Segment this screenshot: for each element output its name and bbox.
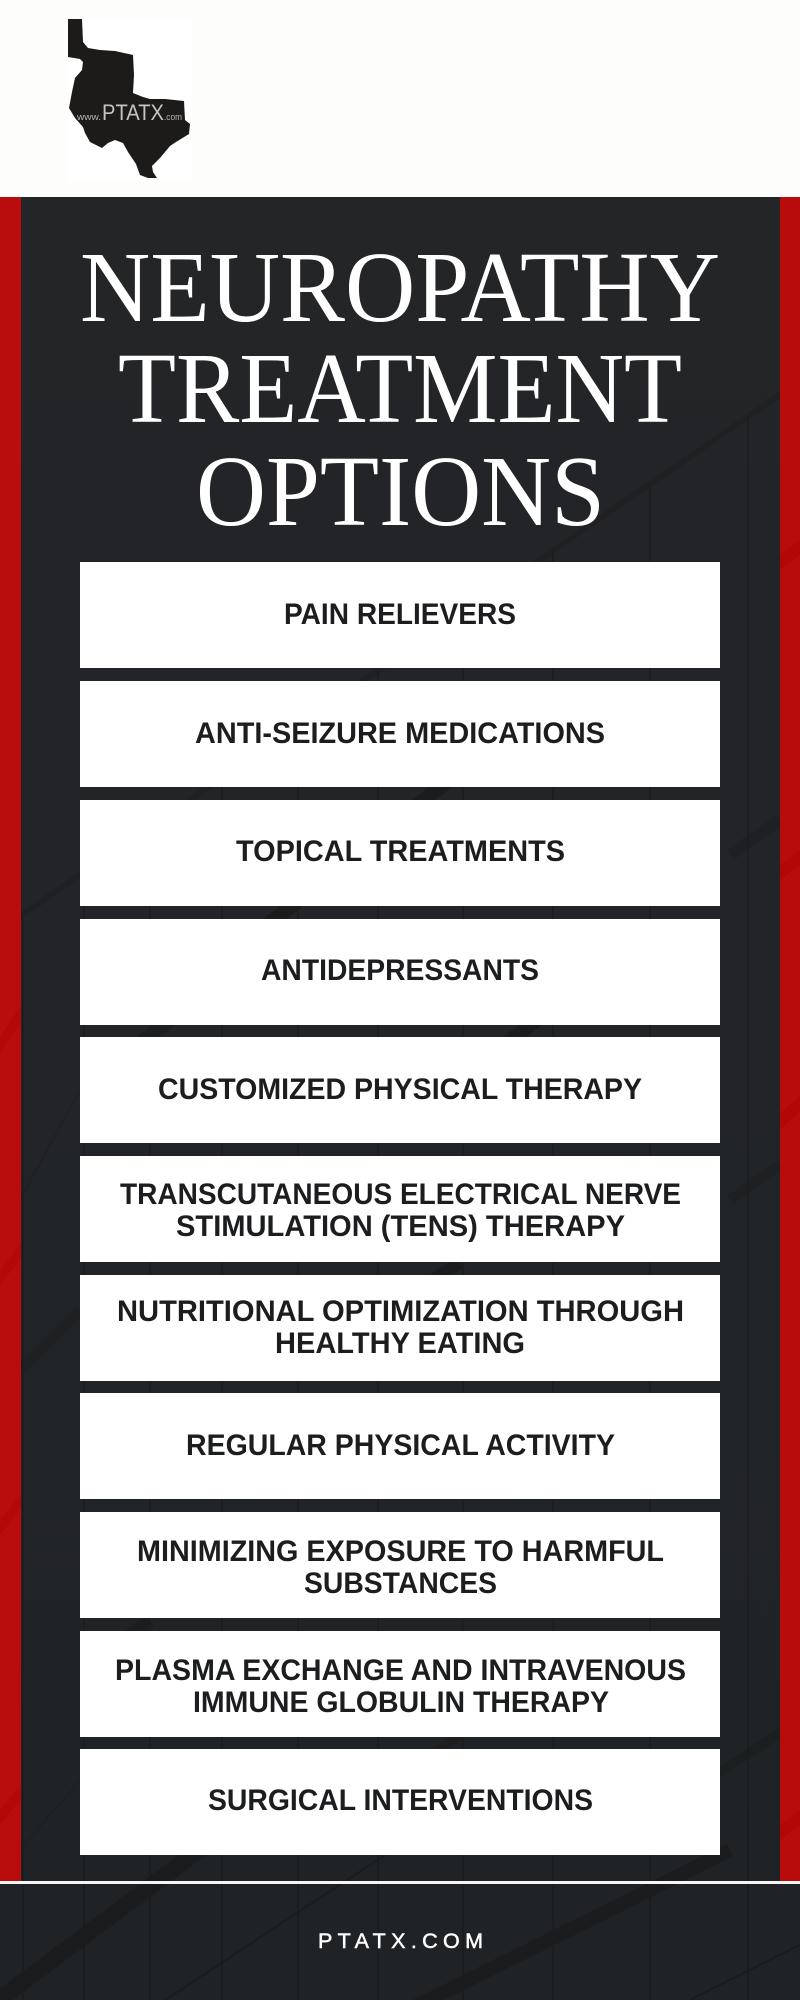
logo: Texas map with PTATX: .com (164, 112, 182, 122)
card: nutritional optimization: NUTRITIONAL OPTIMIZATION THROUGH (117, 1295, 684, 1328)
card: regular physical activity: REGULAR PHYSICAL ACTIVITY (186, 1429, 615, 1462)
footer website: PTATX.COM (318, 1929, 483, 1953)
logo: Texas map with PTATX: www. (76, 112, 101, 122)
card: anti-seizure medications: ANTI-SEIZURE MEDICATIONS (195, 717, 605, 750)
card: anti-seizure medications (80, 681, 720, 787)
card: nutritional optimization (80, 1275, 720, 1381)
card: regular physical activity (80, 1393, 720, 1499)
card: TENS therapy: TRANSCUTANEOUS ELECTRICAL NERVE (120, 1178, 681, 1211)
title: TREATMENT (118, 332, 682, 444)
card: surgical interventions (80, 1749, 720, 1855)
logo: Texas map with PTATX (68, 18, 192, 182)
card: plasma exchange: IMMUNE GLOBULIN THERAPY (193, 1686, 609, 1719)
card: pain relievers (80, 562, 720, 668)
left red bar (0, 197, 21, 1881)
card: TENS therapy (80, 1156, 720, 1262)
card: plasma exchange (80, 1631, 720, 1737)
card: TENS therapy: STIMULATION (TENS) THERAPY (176, 1210, 625, 1243)
card: pain relievers: PAIN RELIEVERS (284, 598, 516, 631)
card: minimizing exposure: MINIMIZING EXPOSURE TO HARMFUL (137, 1535, 664, 1568)
card: plasma exchange: PLASMA EXCHANGE AND INTRAVENOUS (115, 1654, 686, 1687)
card: antidepressants (80, 919, 720, 1025)
card: minimizing exposure: SUBSTANCES (304, 1567, 497, 1600)
card: nutritional optimization: HEALTHY EATING (275, 1327, 525, 1360)
card: antidepressants: ANTIDEPRESSANTS (261, 954, 539, 987)
card: customized physical therapy: CUSTOMIZED PHYSICAL THERAPY (158, 1073, 642, 1106)
card: customized physical therapy (80, 1037, 720, 1143)
logo: Texas map with PTATX: PTATX (102, 100, 164, 125)
header band (0, 0, 800, 197)
white divider line (0, 1881, 800, 1884)
card: topical treatments: TOPICAL TREATMENTS (236, 835, 565, 868)
title: OPTIONS (196, 435, 605, 547)
card: surgical interventions: SURGICAL INTERVENTIONS (208, 1784, 593, 1817)
right red bar (780, 197, 800, 1881)
card: topical treatments (80, 800, 720, 906)
title (80, 231, 720, 547)
title: NEUROPATHY (80, 231, 720, 343)
card: minimizing exposure (80, 1512, 720, 1618)
